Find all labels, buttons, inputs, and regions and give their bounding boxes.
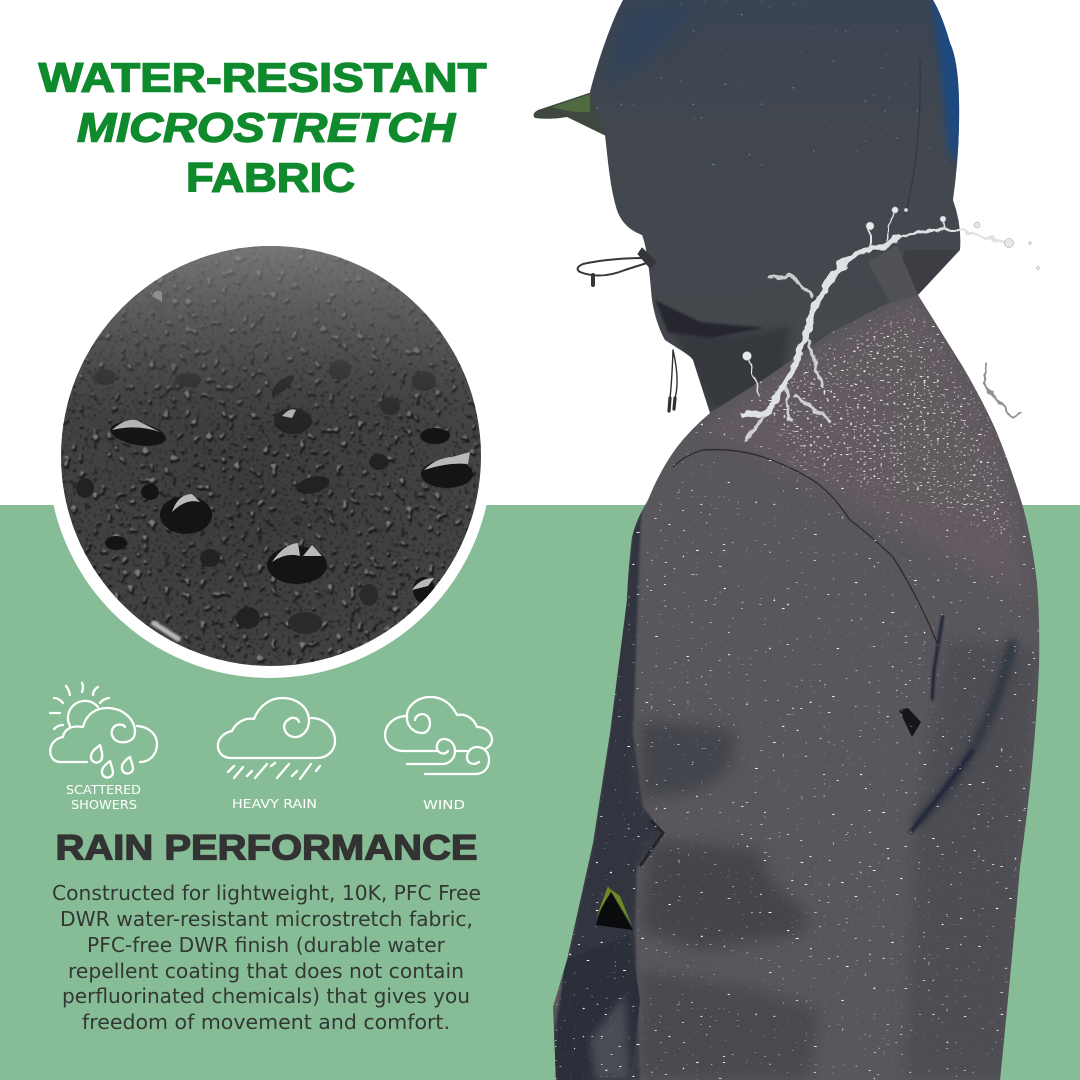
label: wind: WIND — [423, 798, 465, 812]
hood drawcord and toggle — [578, 248, 656, 285]
panel: green lower band — [0, 505, 1080, 1080]
jacket torso and sleeve — [545, 290, 1050, 1080]
icon: heavy rain — [218, 698, 335, 779]
label: scattered showers — [66, 783, 141, 812]
cap brim — [534, 92, 606, 136]
label: heavy rain: HEAVY RAIN — [232, 797, 317, 811]
body text: repellent coating that does not contain — [68, 959, 464, 983]
water splash — [743, 212, 1020, 440]
title line 3: FABRIC — [186, 154, 355, 200]
splash droplets — [742, 207, 1040, 360]
hood — [580, 0, 970, 420]
label: scattered showers: SHOWERS — [71, 798, 137, 812]
dense droplets on shoulder — [754, 302, 1022, 546]
body text: DWR water-resistant microstretch fabric, — [60, 907, 473, 931]
body text: freedom of movement and comfort. — [82, 1010, 450, 1034]
icon: wind — [385, 697, 492, 774]
fabric close-up with water droplets — [60, 246, 482, 666]
lower drawcord — [669, 350, 677, 411]
body text: Constructed for lightweight, 10K, PFC Free — [52, 881, 481, 905]
title line 1: WATER-RESISTANT — [38, 54, 487, 100]
white ring around fabric photo — [48, 234, 492, 678]
title — [38, 54, 487, 200]
body text: perfluorinated chemicals) that gives you — [62, 984, 470, 1008]
title line 2: MICROSTRETCH — [77, 104, 457, 150]
heading: rain performance: RAIN PERFORMANCE — [56, 828, 478, 868]
icon: scattered showers — [50, 683, 157, 778]
body text — [52, 881, 481, 1034]
body text: PFC-free DWR finish (durable water — [87, 933, 446, 957]
photo: man in hooded jacket — [534, 0, 1070, 1080]
label: scattered showers: SCATTERED — [66, 783, 141, 797]
